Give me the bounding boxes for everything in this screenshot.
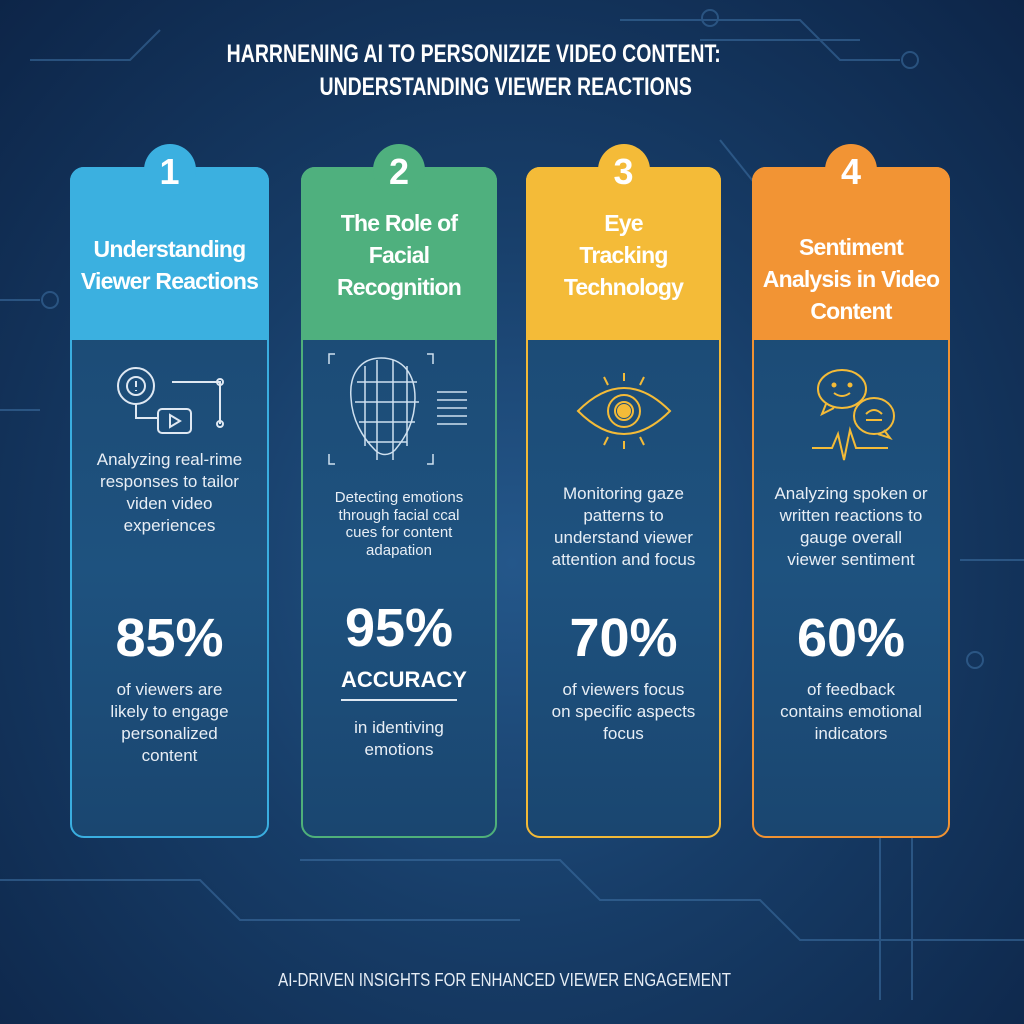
card 1 stat label xyxy=(110,680,229,765)
card 3 header: Technology xyxy=(564,274,683,300)
card 1 number: 1 xyxy=(159,151,180,192)
card 3 header: Eye xyxy=(604,210,643,236)
card 1 header: Understanding xyxy=(94,236,245,262)
card 4 header xyxy=(752,167,950,340)
card 4 stat label xyxy=(780,680,922,743)
card 3 stat: 70% xyxy=(569,608,678,668)
icon: face mesh xyxy=(328,353,467,465)
card 2 header: Recognition xyxy=(337,274,461,300)
card 4 header: Content xyxy=(810,298,892,324)
card 2 description: Detecting emotions xyxy=(335,489,463,506)
card 2 description: through facial ccal xyxy=(339,506,459,524)
card 2 accuracy label xyxy=(341,667,457,701)
icon: chat bubbles xyxy=(812,369,895,460)
card 3 header xyxy=(526,167,721,340)
card 3 stat label: focus xyxy=(603,724,644,743)
card 3 description: patterns to xyxy=(583,506,664,525)
card 4 description: Analyzing spoken or xyxy=(774,484,928,503)
card 2 stat label xyxy=(354,718,444,759)
card 1 description: Analyzing real-rime xyxy=(97,450,242,469)
card 2 number xyxy=(373,144,425,196)
panel: card 1 xyxy=(70,167,269,838)
card 3 description: attention and focus xyxy=(552,550,695,569)
card 1 header xyxy=(70,167,269,340)
card 2 description xyxy=(335,489,463,558)
card 1 description: viden video xyxy=(126,494,212,513)
card 1 stat label: of viewers are xyxy=(117,680,222,699)
card 4 description: gauge overall xyxy=(800,528,902,547)
card 3 number: 3 xyxy=(613,151,634,192)
card 4 stat label: of feedback xyxy=(807,680,895,699)
card 3 header: Tracking xyxy=(579,242,668,268)
card 2 accuracy label: ACCURACY xyxy=(341,667,467,692)
card 4 number: 4 xyxy=(841,151,861,192)
panel: card 4 xyxy=(752,167,950,838)
panel: card 2 xyxy=(301,167,497,838)
footer: AI-DRIVEN INSIGHTS FOR ENHANCED VIEWER ENGAGEMENT xyxy=(279,970,731,990)
title: UNDERSTANDING VIEWER REACTIONS xyxy=(320,73,692,101)
card 2 stat label: emotions xyxy=(364,740,433,759)
card 1 header: Viewer Reactions xyxy=(81,268,258,294)
card 3 stat label xyxy=(552,680,695,743)
panel: card 3 xyxy=(526,167,721,838)
card 1 stat label: personalized xyxy=(121,724,218,743)
card 1 description xyxy=(96,450,242,535)
icon: brain and video xyxy=(117,367,224,434)
card 1 number xyxy=(144,144,196,196)
card 4 header: Analysis in Video xyxy=(763,266,939,292)
card 2 header xyxy=(301,167,497,340)
card 1 description: responses to tailor xyxy=(100,472,239,491)
card 3 number xyxy=(598,144,650,196)
icon: eye xyxy=(576,373,672,449)
card 1 stat label: likely to engage xyxy=(110,702,229,721)
card 3 description: Monitoring gaze xyxy=(563,484,684,503)
card 1 stat label: content xyxy=(142,746,197,765)
card 2 number: 2 xyxy=(389,151,409,192)
card 3 description xyxy=(552,484,695,569)
title: HARRNENING AI TO PERSONIZIZE VIDEO CONTENT: xyxy=(227,40,721,68)
card 4 number xyxy=(825,144,877,196)
card 1 description: experiences xyxy=(124,516,215,535)
card 2 header: The Role of xyxy=(341,210,457,236)
card 4 stat label: contains emotional xyxy=(780,702,922,721)
card 4 description: written reactions to xyxy=(780,506,922,525)
card 1 stat: 85% xyxy=(115,608,224,668)
card 4 header: Sentiment xyxy=(799,234,903,260)
card 2 header: Facial xyxy=(369,242,429,268)
card 4 stat label: indicators xyxy=(815,724,887,743)
card 4 description: viewer sentiment xyxy=(787,550,915,569)
card 4 description xyxy=(774,484,928,569)
card 4 stat: 60% xyxy=(797,608,905,668)
title xyxy=(227,40,721,101)
card 3 stat label: of viewers focus xyxy=(563,680,684,699)
card 2 stat: 95% xyxy=(345,598,453,658)
card 2 description: cues for content xyxy=(346,524,452,541)
card 2 description: adapation xyxy=(366,542,432,558)
card 3 description: understand viewer xyxy=(554,528,693,547)
card 3 stat label: on specific aspects xyxy=(552,702,695,721)
card 2 stat label: in identiving xyxy=(354,718,444,737)
